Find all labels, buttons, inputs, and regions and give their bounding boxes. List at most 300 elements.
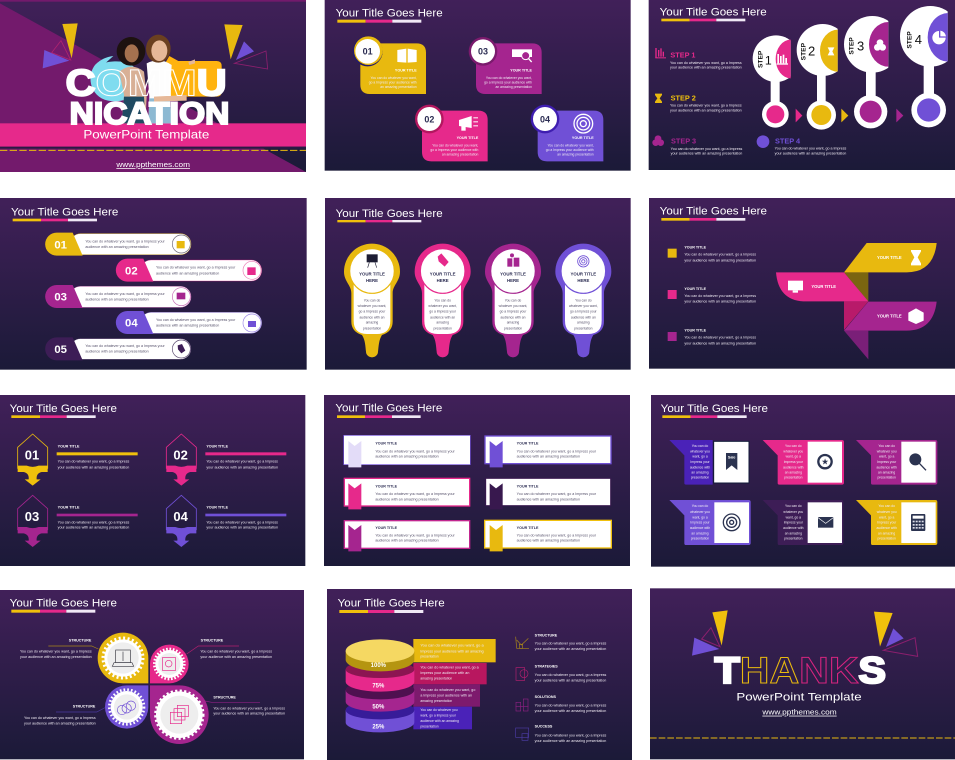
- label bar pink: [413, 663, 487, 684]
- slide 11: stacked cylinder: [327, 589, 632, 760]
- step 4 text: You can do whatever you want, go a Impress: [775, 147, 847, 151]
- card magenta: Impress your: [877, 460, 897, 464]
- icon: magnifier: [909, 453, 926, 470]
- legend item 2: your audience with an amazing presentation: [684, 300, 756, 304]
- title: Your Title Goes Here: [335, 403, 442, 415]
- step 4 text: STEP 4: [775, 136, 801, 145]
- slide 10: four gear petals: [0, 590, 304, 759]
- row 02: You can do whatever you want, go a Impress your: [156, 266, 236, 270]
- card pink: whatever you: [783, 449, 803, 453]
- item 01: your audience with an amazing presentation: [58, 465, 129, 469]
- card pink: You can do whatever you want, go a Impress your: [375, 492, 456, 496]
- card pink: an amazing: [785, 471, 802, 475]
- card yellow: [856, 500, 937, 545]
- card magenta: whatever you: [877, 449, 897, 453]
- cylinder chart: 100%: [371, 663, 387, 669]
- row 03: audience with an amazing presentation: [85, 298, 149, 302]
- pin 3: You can do: [505, 299, 521, 303]
- label bar indigo: [413, 707, 472, 729]
- list item strategies: STRATEGIES: [535, 665, 558, 669]
- pin 3: amazing: [507, 321, 519, 325]
- card dark purple: whatever you: [783, 510, 803, 514]
- card dark purple: an amazing: [785, 531, 802, 535]
- list item strategies: [516, 665, 607, 682]
- slide 2: four numbered cards: [325, 0, 631, 171]
- card indigo: [669, 440, 749, 485]
- pin 1: presentation: [363, 326, 381, 330]
- card violet: [485, 436, 611, 467]
- pin 4: go a Impress your: [570, 310, 598, 314]
- card yellow: [485, 520, 611, 551]
- pin 3: audience with an: [501, 315, 526, 319]
- step 3 text: STEP 3: [671, 136, 696, 145]
- legend item 1: YOUR TITLE: [684, 245, 707, 249]
- card violet: YOUR TITLE: [517, 442, 539, 446]
- card pink: Impress your: [784, 460, 804, 464]
- label bar yellow: [413, 639, 496, 662]
- card 02: You can do whatever you want,: [432, 143, 478, 147]
- confetti triangles left: [692, 610, 728, 656]
- pin 2: audience with an: [430, 315, 455, 319]
- label bar yellow: presentation: [420, 655, 439, 659]
- pin 3: go a Impress your: [500, 310, 527, 314]
- headline: THANKS: [715, 649, 886, 691]
- item 02: [166, 434, 286, 486]
- pin 4: whatever you want,: [569, 304, 598, 308]
- card yellow: Impress your: [877, 521, 897, 525]
- card pink: You can do: [785, 444, 802, 448]
- card indigo: Impress your: [690, 460, 711, 464]
- row 01: You can do whatever you want, go a Impress your: [85, 239, 166, 243]
- card 01: go a Impress your audience with: [369, 80, 417, 84]
- pin 4: presentation: [574, 326, 593, 330]
- card 03: [469, 37, 542, 94]
- item 02: 02: [173, 448, 188, 463]
- row 05: audience with an amazing presentation: [85, 350, 149, 354]
- item 03: You can do whatever you want, go a Impress: [58, 520, 130, 524]
- list item solutions: SOLUTIONS: [535, 695, 557, 699]
- card dark purple: You can do: [785, 504, 802, 508]
- pin 3: presentation: [504, 326, 522, 330]
- speech bubble orange: [165, 56, 222, 97]
- card dark purple: audience with: [783, 526, 804, 530]
- step 3 text: [652, 135, 743, 156]
- confetti triangles left: [43, 23, 78, 68]
- url: www.ppthemes.com: [115, 160, 190, 169]
- callout top-right: You can do whatever you want, go a Impress: [200, 650, 272, 654]
- pink band: [0, 123, 306, 147]
- item 04: [166, 495, 286, 547]
- step 2 text: [655, 93, 742, 112]
- card 01: 01: [363, 47, 373, 57]
- row 05: 05: [54, 344, 67, 356]
- card magenta: You can do whatever you want, go a Impress your: [375, 533, 456, 537]
- pin 1: HERE: [366, 278, 378, 283]
- card pink: YOUR TITLE: [375, 484, 398, 488]
- icon: calculator: [911, 514, 925, 531]
- card 03: go a Impress your audience with: [484, 80, 532, 84]
- list item solutions: your audience with an amazing presentation: [535, 709, 606, 713]
- card yellow: audience with: [876, 526, 897, 530]
- card violet: You can do whatever you want, go a Impress your: [517, 449, 597, 453]
- pin 1: amazing: [366, 321, 378, 325]
- icon: coins: [507, 253, 519, 267]
- card 02: go a Impress your audience with: [430, 148, 478, 152]
- card dark: audience with an amazing presentation: [517, 497, 580, 501]
- item 03: your audience with an amazing presentation: [58, 526, 129, 530]
- step 3 graphic: [844, 16, 908, 128]
- card indigo: want, go a: [692, 455, 708, 459]
- confetti triangles right: [224, 24, 268, 69]
- card pink: presentation: [784, 476, 803, 480]
- card 02: 02: [424, 114, 434, 124]
- icon: chart book: [397, 49, 417, 63]
- pin 3: [485, 244, 541, 357]
- pin 1: audience with an: [360, 315, 385, 319]
- card yellow: want, go a: [879, 515, 894, 519]
- label bar magenta: [413, 684, 480, 707]
- step 4 graphic: [900, 6, 955, 127]
- card magenta: YOUR TITLE: [375, 526, 398, 530]
- pin 4: YOUR TITLE: [570, 271, 596, 276]
- petal yellow with gear: [98, 633, 148, 683]
- icon: video frame: [162, 658, 176, 670]
- card magenta: You can do: [878, 444, 895, 448]
- callout bottom-left: [24, 704, 105, 725]
- step 1 graphic: 1: [765, 54, 772, 68]
- card indigo: whatever you: [690, 449, 710, 453]
- item 04: your audience with an amazing presentation: [206, 526, 278, 530]
- pin 2: HERE: [437, 278, 449, 283]
- petal pink with gear: [150, 645, 189, 683]
- arrows: [796, 109, 903, 122]
- card 04: go a Impress your audience with: [546, 148, 594, 152]
- pin 3: HERE: [507, 278, 519, 283]
- headline: COMMU: [66, 62, 227, 104]
- callout top-left: You can do whatever you want, go a Impress: [20, 650, 92, 654]
- legend item 2: [668, 287, 756, 304]
- headline: NICATION: [70, 96, 229, 131]
- step 4 graphic: STEP: [907, 31, 914, 49]
- title: Your Title Goes Here: [10, 597, 117, 609]
- petal magenta with gear: [150, 685, 209, 744]
- pin 2: [415, 244, 471, 357]
- card pink: audience with an amazing presentation: [375, 497, 439, 501]
- row 05: [45, 337, 191, 360]
- card 04: You can do whatever you want,: [548, 143, 594, 147]
- card pink: [344, 478, 470, 509]
- row 03: 03: [54, 292, 67, 304]
- item 03: [18, 495, 138, 547]
- card 03: YOUR TITLE: [510, 68, 533, 72]
- step 2 graphic: [797, 24, 856, 130]
- icon: sale bookmark: Sale: [728, 456, 735, 460]
- card pink: audience with: [783, 465, 804, 469]
- title: Your Title Goes Here: [338, 598, 445, 610]
- step 4 graphic: 4: [915, 32, 922, 47]
- list item success: [516, 724, 607, 743]
- confetti triangles right: [874, 612, 918, 656]
- item 01: [18, 434, 138, 486]
- item 03: YOUR TITLE: [58, 505, 80, 509]
- label bar yellow: Impress your audience with an amazing: [420, 649, 484, 653]
- dashed line: [0, 149, 306, 152]
- card 01: an amazing presentation: [380, 85, 417, 89]
- slide 1: cover: [0, 0, 306, 172]
- ribbon purple: [844, 302, 937, 331]
- pin 2: go a Impress your: [429, 310, 457, 314]
- slide 6: folded ribbons: [649, 198, 955, 369]
- item 02: You can do whatever you want, go a Impress: [206, 460, 278, 464]
- pin 2: You can do: [434, 299, 451, 303]
- cylinder chart: [346, 639, 414, 732]
- pin 4: amazing: [577, 321, 590, 325]
- photo: two women: [117, 35, 195, 123]
- slide 9: six flag cards: [651, 395, 955, 567]
- callout top-left: your audience with an amazing presentation: [20, 655, 92, 659]
- row 03: You can do whatever you want, go a Impress your: [85, 292, 166, 296]
- item 04: You can do whatever you want, go a Impress: [206, 520, 278, 524]
- card dark purple: presentation: [784, 537, 803, 541]
- row 02: [116, 259, 262, 282]
- ribbon purple: YOUR TITLE: [877, 314, 902, 319]
- slide 12: thanks: [650, 588, 955, 759]
- card indigo: You can do: [692, 444, 708, 448]
- card 04: 04: [540, 114, 550, 124]
- callout bottom-left: your audience with an amazing presentation: [24, 721, 96, 725]
- icon: target: [574, 114, 593, 133]
- callout bottom-left: You can do whatever you want, go a Impress: [24, 716, 96, 720]
- card yellow: You can do: [878, 504, 895, 508]
- icon: star badge: ★: [821, 457, 829, 467]
- callout bottom-left: STRUCTURE: [73, 704, 96, 708]
- pin 1: You can do: [364, 299, 380, 303]
- card dark purple: Impress your: [784, 521, 804, 525]
- icon: price tag: [438, 253, 449, 267]
- list item structure: STRUCTURE: [535, 633, 558, 637]
- card violet: whatever you: [690, 510, 710, 514]
- slide 5: four location pins: [325, 198, 631, 370]
- card light: You can do whatever you want, go a Impress your: [375, 449, 456, 453]
- list item success: SUCCESS: [535, 724, 553, 728]
- pin 1: go a Impress your: [359, 310, 386, 314]
- card 02: YOUR TITLE: [457, 136, 479, 140]
- card magenta: an amazing: [878, 471, 895, 475]
- card 03: an amazing presentation: [496, 85, 532, 89]
- legend item 2: You can do whatever you want, go a Impress: [684, 294, 756, 298]
- headline: [66, 62, 229, 131]
- step 1 text: your audience with an amazing presentation: [670, 66, 742, 70]
- pin 1: whatever you want,: [358, 304, 386, 308]
- card light: YOUR TITLE: [375, 442, 398, 446]
- card 02: an amazing presentation: [442, 153, 478, 157]
- label bar indigo: presentation: [420, 725, 439, 729]
- card dark purple: want, go a: [786, 515, 801, 519]
- list item strategies: your audience with an amazing presentation: [535, 678, 606, 682]
- pin 1: [344, 244, 400, 357]
- list item solutions: [516, 695, 607, 713]
- row 01: 01: [54, 239, 67, 251]
- callout bottom-right: [205, 695, 285, 716]
- slide 7: four hexagon arrows: [0, 395, 305, 566]
- pin 4: audience with an: [571, 315, 596, 319]
- title: Your Title Goes Here: [661, 403, 768, 415]
- card magenta: presentation: [878, 476, 896, 480]
- label bar magenta: You can do whatever you want, go: [420, 688, 475, 692]
- card magenta: [344, 521, 470, 551]
- row 05: You can do whatever you want, go a Impress your: [85, 344, 166, 348]
- list item solutions: You can do whatever you want, go a Impress: [535, 704, 607, 708]
- step 2 text: STEP 2: [671, 93, 696, 102]
- row 01: audience with an amazing presentation: [85, 245, 149, 249]
- cylinder chart: 25%: [372, 725, 385, 731]
- legend item 3: [668, 328, 756, 345]
- subtitle: PowerPoint Template: [83, 127, 210, 141]
- list item strategies: You can do whatever you want, go a Impress: [535, 673, 607, 677]
- label bar magenta: amazing presentation: [420, 699, 452, 703]
- icon: laptop: [112, 650, 134, 666]
- card 04: [531, 105, 603, 161]
- callout bottom-right: You can do whatever you want, go a Impress: [213, 706, 285, 710]
- icon: target: [723, 514, 740, 531]
- card 03: You can do whatever you want,: [486, 76, 532, 80]
- icon: droplets: [117, 701, 136, 715]
- ribbon pink: [776, 272, 868, 301]
- card 04: YOUR TITLE: [572, 136, 594, 140]
- title: Your Title Goes Here: [336, 208, 443, 220]
- pin 4: You can do: [575, 299, 592, 303]
- card yellow: presentation: [878, 537, 896, 541]
- callout top-left: STRUCTURE: [69, 638, 92, 642]
- card yellow: You can do whatever you want, go a Impress your: [517, 533, 597, 537]
- card 04: an amazing presentation: [557, 153, 594, 157]
- row 04: You can do whatever you want, go a Impress your: [156, 318, 236, 322]
- card magenta: [856, 440, 937, 485]
- pin 2: amazing: [436, 321, 449, 325]
- label bar pink: Impress your audience with an: [420, 671, 469, 675]
- step 2 text: your audience with an amazing presentation: [670, 108, 742, 112]
- card 01: YOUR TITLE: [395, 68, 417, 72]
- title: Your Title Goes Here: [11, 207, 118, 219]
- card yellow: an amazing: [878, 531, 895, 535]
- item 02: YOUR TITLE: [206, 445, 229, 449]
- row 02: 02: [125, 265, 138, 277]
- card dark purple: [763, 500, 843, 545]
- slide 3: four steps: [649, 0, 955, 170]
- step 1 graphic: STEP: [758, 50, 765, 68]
- card pink: want, go a: [786, 455, 801, 459]
- card indigo: audience with: [690, 465, 710, 469]
- card dark: [486, 478, 611, 509]
- label bar pink: You can do whatever you want, go a: [420, 665, 479, 669]
- card 02: [415, 105, 488, 161]
- card light: audience with an amazing presentation: [375, 455, 439, 459]
- card pink: [763, 440, 844, 485]
- pin 3: whatever you want,: [499, 304, 527, 308]
- label bar yellow: You can do whatever you want, go a: [420, 644, 484, 648]
- step 3 text: your audience with an amazing presentation: [671, 152, 742, 156]
- card violet: audience with an amazing presentation: [517, 455, 580, 459]
- ribbon yellow: [844, 243, 937, 272]
- title: Your Title Goes Here: [660, 7, 767, 19]
- step 1 text: STEP 1: [670, 50, 695, 59]
- pin 4: [555, 244, 611, 357]
- row 03: [45, 285, 191, 308]
- callout bottom-right: your audience with an amazing presentation: [213, 712, 285, 716]
- pin 2: YOUR TITLE: [430, 271, 456, 276]
- label bar indigo: want, go a Impress your: [420, 714, 457, 718]
- slide 8: six ribbon cards: [324, 395, 630, 566]
- card violet: [669, 500, 751, 545]
- step 4 text: your audience with an amazing presentation: [775, 151, 846, 155]
- row 04: 04: [125, 318, 138, 330]
- step 3 text: You can do whatever you want, go a Impress: [671, 147, 743, 151]
- step 1 graphic: [752, 35, 791, 128]
- icon: envelope: [818, 517, 833, 528]
- list item structure: [516, 633, 607, 651]
- row 04: audience with an amazing presentation: [156, 324, 219, 328]
- step 1 text: [655, 48, 742, 70]
- legend item 2: YOUR TITLE: [684, 287, 707, 291]
- card violet: Impress your: [690, 521, 711, 525]
- label bar pink: amazing presentation: [420, 677, 452, 681]
- cylinder chart: 50%: [372, 704, 385, 710]
- row 02: audience with an amazing presentation: [156, 271, 219, 275]
- pin 1: YOUR TITLE: [359, 271, 385, 276]
- step 2 text: You can do whatever you want, go a Impress: [670, 104, 742, 108]
- speech bubble blue: [90, 56, 141, 101]
- pin 2: whatever you want,: [428, 304, 457, 308]
- card violet: want, go a: [692, 515, 708, 519]
- list item structure: your audience with an amazing presentation: [535, 647, 606, 651]
- step 2 graphic: 2: [808, 44, 815, 59]
- callout top-right: your audience with an amazing presentation: [200, 655, 272, 659]
- legend item 3: You can do whatever you want, go a Impress: [684, 335, 756, 339]
- list item success: your audience with an amazing presentation: [535, 739, 606, 743]
- label bar magenta: a Impress your audience with an: [420, 693, 472, 697]
- card magenta: audience with an amazing presentation: [375, 539, 439, 543]
- item 01: YOUR TITLE: [58, 445, 80, 449]
- card 03: 03: [478, 47, 488, 57]
- row 04: [116, 311, 262, 334]
- card indigo: an amazing: [691, 471, 709, 475]
- pin 4: HERE: [577, 278, 589, 283]
- card 01: You can do whatever you want,: [371, 76, 417, 80]
- subtitle: PowerPoint Template: [736, 691, 862, 703]
- card yellow: whatever you: [877, 510, 897, 514]
- item 03: 03: [25, 509, 39, 524]
- label bar indigo: audience with an amazing: [420, 719, 459, 723]
- icon: target: [578, 256, 589, 267]
- ribbon yellow: YOUR TITLE: [877, 255, 902, 260]
- step 3 graphic: STEP: [848, 37, 855, 55]
- icon: presentation board: [367, 254, 378, 268]
- title: Your Title Goes Here: [660, 206, 767, 218]
- callout bottom-right: STRUCTURE: [213, 695, 236, 699]
- label bar indigo: You can do whatever you: [420, 708, 458, 712]
- title: Your Title Goes Here: [10, 403, 117, 415]
- list item structure: You can do whatever you want, go a Impress: [535, 642, 607, 646]
- card indigo: presentation: [691, 476, 709, 480]
- petal violet with gear: [105, 685, 148, 729]
- legend item 3: your audience with an amazing presentation: [684, 341, 756, 345]
- icon: image stack: [170, 705, 188, 724]
- step 2 graphic: STEP: [800, 42, 807, 60]
- card dark: You can do whatever you want, go a Impress your: [517, 492, 597, 496]
- callout top-left: [20, 638, 98, 659]
- item 02: your audience with an amazing presentation: [206, 465, 278, 469]
- title: Your Title Goes Here: [336, 8, 443, 20]
